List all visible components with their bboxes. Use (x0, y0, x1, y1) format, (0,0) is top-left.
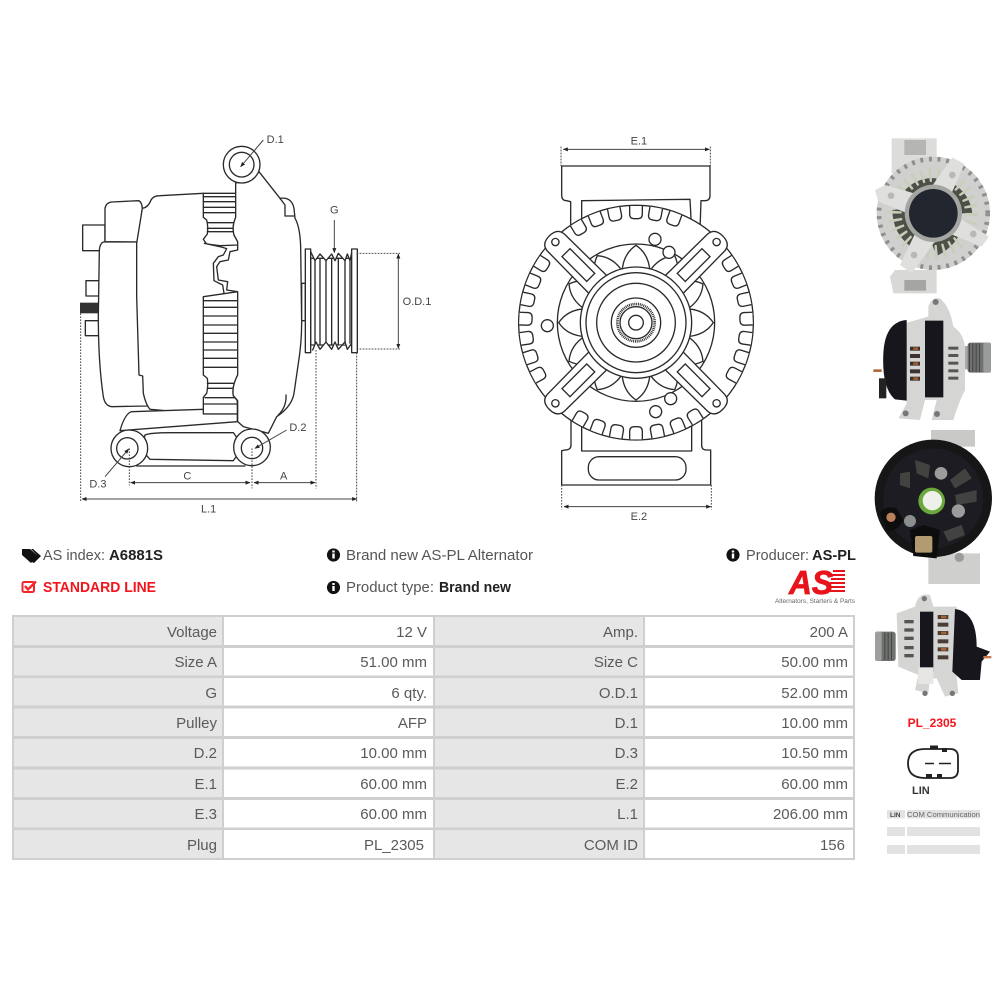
width labels: E.1 (631, 135, 647, 147)
table labels: Size C (594, 654, 638, 671)
table values: 156 (820, 837, 845, 854)
icon: plug connector (908, 746, 958, 797)
table labels: L.1 (617, 806, 638, 823)
housing holes (541, 233, 677, 418)
icon: info (726, 548, 740, 562)
table values: 52.00 mm (781, 685, 848, 702)
table labels: Voltage (167, 624, 217, 641)
icon: tags (22, 549, 41, 563)
plug code: PL_2305 (908, 716, 957, 730)
dimension labels: L.1 (201, 503, 216, 515)
bottom bracket (562, 417, 711, 485)
table labels: D.2 (194, 745, 217, 762)
mounting eye D.1 (223, 146, 260, 183)
info row: description: Brand new AS-PL Alternator (346, 547, 533, 564)
specification table (12, 615, 855, 860)
info row: AS index: A6881S (109, 547, 163, 564)
pin table: LIN (890, 812, 901, 819)
AS logo: AS (788, 564, 833, 601)
table labels (167, 624, 638, 854)
table labels: E.2 (615, 776, 638, 793)
dimension labels: A (280, 471, 288, 483)
table labels: D.1 (615, 715, 638, 732)
icon: info (327, 548, 340, 562)
mounting eye D.2 (234, 429, 270, 466)
table values: 60.00 mm (360, 776, 427, 793)
pulley (302, 249, 357, 353)
info row: AS index: AS index: (43, 547, 105, 564)
front housing (217, 172, 302, 433)
table values: PL_2305 (364, 837, 424, 854)
table labels: O.D.1 (599, 685, 638, 702)
table values: 6 qty. (391, 685, 427, 702)
dimension labels: D.2 (289, 422, 306, 434)
mounting eye D.3 (111, 430, 148, 467)
icon: checked box (22, 582, 36, 592)
table values: 50.00 mm (781, 654, 848, 671)
info row: producer: AS-PL (812, 547, 856, 564)
standard line badge: STANDARD LINE (43, 579, 156, 596)
table values: AFP (398, 715, 427, 732)
info row: producer (726, 547, 856, 564)
table values: 10.00 mm (781, 715, 848, 732)
mounting arm (120, 409, 237, 431)
info row: product type: Brand new (439, 579, 511, 596)
photo: alternator front (875, 138, 990, 293)
table labels: Plug (187, 837, 217, 854)
AS logo: Alternators, Starters & Parts (775, 598, 856, 605)
table values: 206.00 mm (773, 806, 848, 823)
mounting arms (540, 227, 732, 418)
table labels: Amp. (603, 624, 638, 641)
width dimensions (561, 147, 711, 509)
table labels: E.1 (194, 776, 217, 793)
info row: AS index (22, 547, 163, 564)
table values: 12 V (396, 624, 427, 641)
stator body (137, 193, 203, 414)
table labels: COM ID (584, 837, 638, 854)
info row: product type: Product type: (346, 579, 434, 596)
width labels: E.2 (631, 511, 647, 523)
table labels: Size A (174, 654, 217, 671)
icon: plug connector: LIN (912, 785, 930, 797)
photo: alternator rear (875, 430, 992, 584)
pin table: COM Communication (907, 812, 980, 819)
table values: 200 A (810, 624, 848, 641)
rear cover (80, 201, 147, 407)
table values: 60.00 mm (781, 776, 848, 793)
dimension labels: O.D.1 (403, 296, 431, 308)
table labels: G (205, 685, 217, 702)
table values: 60.00 mm (360, 806, 427, 823)
top bracket (562, 166, 710, 230)
dimension labels: D.1 (267, 134, 284, 146)
housing disc with cooling slots (519, 205, 753, 440)
hub and shaft (580, 267, 692, 378)
pin table (887, 810, 980, 854)
table values: 51.00 mm (360, 654, 427, 671)
table values: 10.00 mm (360, 745, 427, 762)
icon: info (327, 581, 340, 594)
table labels: E.3 (194, 806, 217, 823)
table labels: D.3 (615, 745, 638, 762)
width labels (631, 135, 647, 523)
info row: product type (327, 579, 511, 596)
stator fins (203, 193, 238, 414)
dimension labels: C (183, 471, 191, 483)
dimension labels: D.3 (89, 479, 106, 491)
side view technical drawing (80, 134, 431, 515)
photo: alternator side (873, 298, 991, 420)
fan blades (557, 244, 715, 401)
table values: 10.50 mm (781, 745, 848, 762)
front view technical drawing (519, 135, 753, 523)
info row: producer: Producer: (746, 547, 809, 564)
dimension labels: G (330, 205, 339, 217)
AS logo (775, 564, 856, 605)
dimension lines (81, 140, 400, 502)
dimension labels (89, 134, 431, 515)
table values (360, 624, 848, 854)
photo: alternator side mirrored (875, 594, 991, 697)
table labels: Pulley (176, 715, 217, 732)
